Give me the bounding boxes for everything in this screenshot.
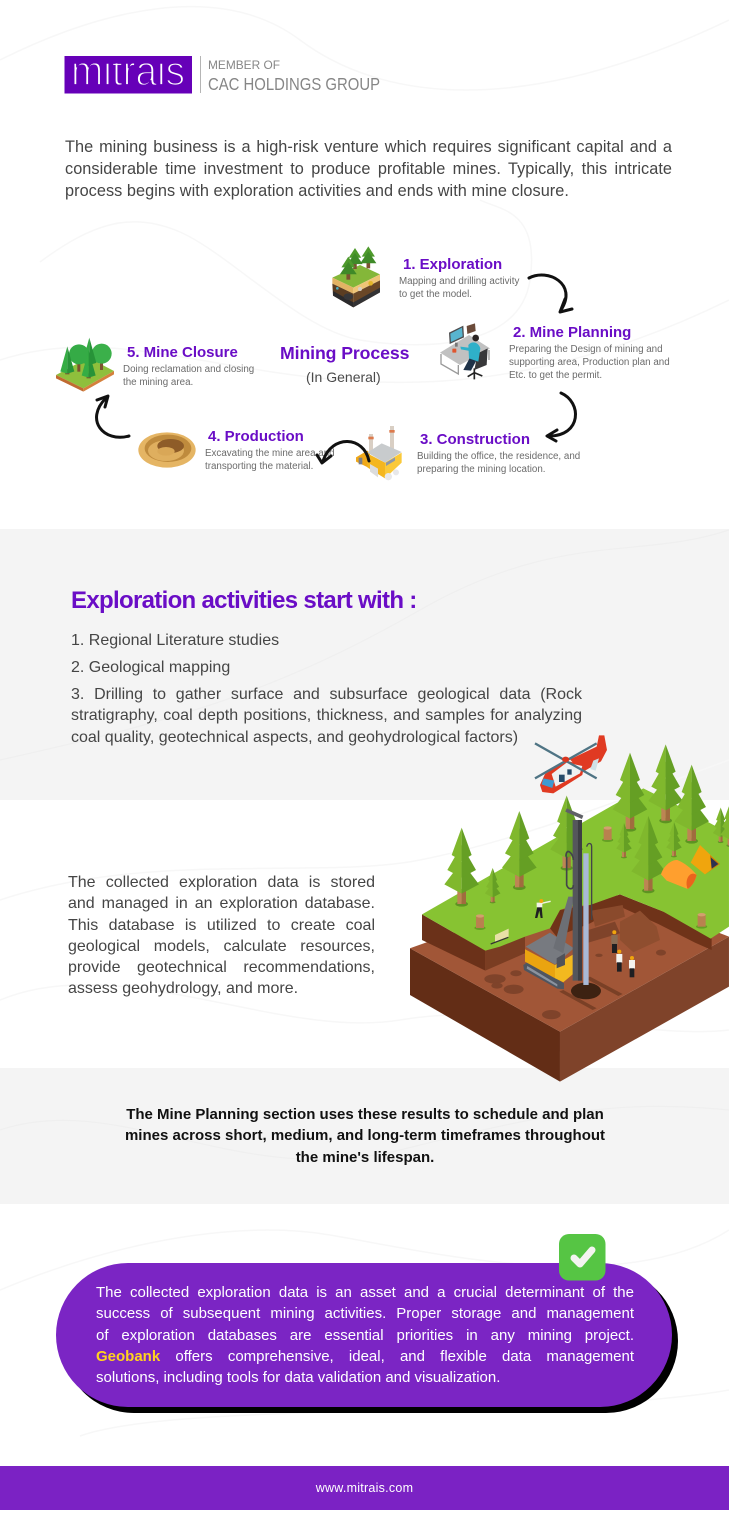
exploration list: coal quality, geotechnical aspects, and geohydrological factors) bbox=[71, 729, 518, 746]
ground block bbox=[410, 894, 729, 1082]
helicopter bbox=[535, 735, 607, 793]
intro paragraph: considerable time investment to produce profitable mines. Typically, this intricate bbox=[65, 160, 672, 178]
exploration list: stratigraphy, coal depth positions, thickness, and samples for analyzing bbox=[71, 707, 582, 724]
step 4 title: 4. Production bbox=[208, 428, 304, 445]
intro paragraph: process begins with exploration activities and ends with mine closure. bbox=[65, 182, 569, 200]
workers bbox=[535, 899, 635, 977]
step 3 title: 3. Construction bbox=[420, 431, 530, 448]
arrow: planning to construction bbox=[547, 393, 576, 441]
logo: Mitrais, member of CAC Holdings Group bbox=[64, 56, 380, 94]
paragraph: exploration database: provide geotechnical recommendations, bbox=[68, 959, 375, 976]
arrow: production to closure bbox=[97, 396, 129, 437]
exploration heading: Exploration activities start with : bbox=[71, 587, 417, 614]
panel: exploration activities bbox=[71, 587, 582, 746]
callout text: Geobank offers comprehensive, ideal, and flexible data management bbox=[96, 1348, 634, 1365]
step 3 description bbox=[417, 451, 580, 475]
surveyor bbox=[535, 899, 551, 918]
callout text: The collected exploration data is an asset and a crucial determinant of the bbox=[96, 1284, 634, 1301]
step 1 description bbox=[399, 276, 520, 300]
pill shadow bbox=[62, 1269, 678, 1413]
icon: mine closure forest bbox=[56, 338, 114, 392]
step 3 description: Building the office, the residence, and bbox=[417, 451, 580, 462]
forest trees bbox=[444, 744, 729, 907]
drilling rig bbox=[523, 810, 601, 999]
exploration list bbox=[71, 632, 582, 746]
orange tents bbox=[661, 845, 720, 889]
step 2 description: Etc. to get the permit. bbox=[509, 370, 602, 381]
engineer right bbox=[629, 956, 635, 977]
diagram heading: Mining Process: Mining Process bbox=[280, 343, 409, 363]
step 5 description: the mining area. bbox=[123, 377, 193, 388]
step 4 description bbox=[205, 448, 335, 472]
step 2 description: supporting area, Production plan and bbox=[509, 357, 670, 368]
exploration list: 1. Regional Literature studies bbox=[71, 632, 279, 649]
paragraph: exploration database: and managed in an exploration database. bbox=[68, 895, 375, 912]
panel: mining process diagram bbox=[123, 256, 670, 475]
process icons and arrows bbox=[56, 246, 577, 480]
icon: mine planning desk worker bbox=[440, 323, 490, 379]
exploration list: 2. Geological mapping bbox=[71, 659, 230, 676]
mine planning statement: the mine's lifespan. bbox=[296, 1149, 434, 1166]
illustration: isometric drilling site bbox=[410, 735, 729, 1082]
engineer left bbox=[616, 950, 622, 972]
step 5 description bbox=[123, 364, 254, 388]
dirt mounds bbox=[484, 950, 666, 1019]
callout text bbox=[96, 1284, 634, 1386]
logo: Mitrais, member of CAC Holdings Group: CAC HOLDINGS GROUP bbox=[208, 74, 380, 94]
step 1 description: Mapping and drilling activity bbox=[399, 276, 519, 287]
geologist bbox=[611, 930, 618, 953]
footer url: www.mitrais.com bbox=[316, 1481, 413, 1495]
logo: Mitrais, member of CAC Holdings Group: mitrais bbox=[71, 47, 185, 94]
paragraph: exploration database: geological models, calculate resources, bbox=[68, 938, 375, 955]
mine planning statement: The Mine Planning section uses these results to schedule and plan bbox=[126, 1106, 604, 1123]
step 2 description bbox=[509, 344, 670, 381]
step 4 description: transporting the material. bbox=[205, 461, 313, 472]
callout text: solutions, including tools for data validation and visualization. bbox=[96, 1369, 500, 1386]
intro paragraph: The mining business is a high-risk venture which requires significant capital and a bbox=[65, 138, 672, 156]
icon: production open pit bbox=[138, 432, 196, 468]
step 5 description: Doing reclamation and closing bbox=[123, 364, 254, 375]
mine planning statement bbox=[125, 1106, 605, 1166]
footer bar bbox=[0, 1466, 729, 1510]
exploration list: 3. Drilling to gather surface and subsurface geological data (Rock bbox=[71, 686, 582, 703]
sign board bbox=[491, 929, 509, 944]
callout: Geobank pill bbox=[56, 1263, 678, 1413]
step 1 title: 1. Exploration bbox=[403, 256, 502, 273]
callout text: success of subsequent mining activities. Proper storage and management bbox=[96, 1305, 634, 1322]
step 1 description: to get the model. bbox=[399, 289, 472, 300]
icon: construction factory bbox=[356, 426, 402, 480]
paragraph: exploration database bbox=[68, 874, 375, 997]
arrow: exploration to planning bbox=[529, 275, 572, 312]
mine planning statement: mines across short, medium, and long-term timeframes throughout bbox=[125, 1127, 605, 1144]
diagram subheading: (In General) bbox=[306, 369, 381, 385]
paragraph: exploration database: The collected exploration data is stored bbox=[68, 874, 375, 891]
icon: exploration soil block bbox=[332, 246, 380, 307]
step 5 title: 5. Mine Closure bbox=[127, 344, 238, 361]
step 2 description: Preparing the Design of mining and bbox=[509, 344, 663, 355]
paragraph: exploration database: assess geohydrology, and more. bbox=[68, 980, 298, 997]
grass top bbox=[422, 788, 729, 951]
intro paragraph bbox=[65, 138, 672, 200]
arrow: construction to production bbox=[317, 441, 369, 463]
step 3 description: preparing the mining location. bbox=[417, 464, 546, 475]
step 2 title: 2. Mine Planning bbox=[513, 324, 631, 341]
logo: Mitrais, member of CAC Holdings Group: MEMBER OF bbox=[208, 58, 280, 72]
pill body bbox=[56, 1263, 672, 1407]
callout text: of exploration databases are essential priorities in any mining project. bbox=[96, 1327, 634, 1344]
tree stumps bbox=[474, 826, 707, 930]
paragraph: exploration database: This database is utilized to create coal bbox=[68, 917, 375, 934]
step 4 description: Excavating the mine area and bbox=[205, 448, 335, 459]
